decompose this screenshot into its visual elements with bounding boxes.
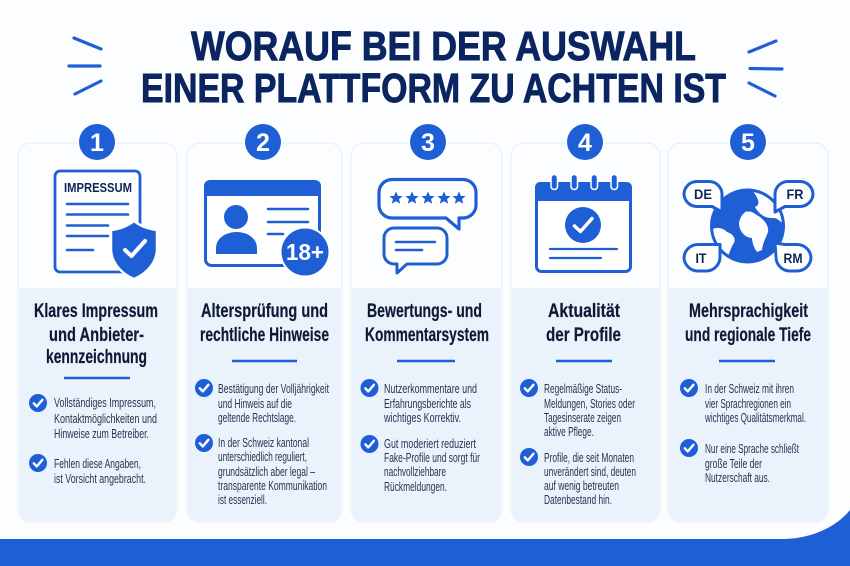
bullet 3.2: Fake-Profile und sorgt für [384,450,480,465]
heading 3: Kommentarsystem [365,325,489,346]
title [141,23,726,111]
bullet 1.1: Hinweise zum Betreiber. [54,426,149,441]
bullet 2.2 [195,434,327,507]
bullet 3.2: nachvollziehbare [384,464,446,479]
bullet 2.1: und Hinweis auf die [218,396,292,411]
icon: ID card 18+ [204,180,330,276]
badge 1 [77,122,117,162]
title: WORAUF BEI DER AUSWAHL [191,23,696,69]
badge 5: 5 [741,129,755,157]
bullet 1.1: Vollständiges Impressum, [54,395,156,410]
heading 5: Mehrsprachigkeit [689,301,809,322]
bullet 4.2: Profile, die seit Monaten [544,450,634,465]
bullet 1.2: Fehlen diese Angaben, [54,456,141,471]
bullet 2.1: Bestätigung der Volljährigkeit [218,381,329,396]
bullet 2.2: In der Schweiz kantonal [218,435,309,450]
heading 2: Altersprüfung und [201,301,328,322]
badge 2 [243,122,283,162]
heading 4: Aktualität [548,301,621,322]
bullet 5.2 [680,439,799,485]
bullet 4.2: auf wenig betreuten [544,478,619,493]
icon: document with shield [55,171,157,279]
panel 4: Aktualität [511,122,660,522]
icon: calendar with check [535,174,632,272]
icon: rating speech bubbles [379,180,476,273]
bullet 4.1: Tagesinserate zeigen [544,410,621,425]
bullet 4.2 [520,448,636,507]
bullet 2.2: unterschiedlich reguliert, [218,449,307,464]
heading 4 [546,301,621,346]
bullet 5.2: Nutzerschaft aus. [705,470,770,485]
bullet 1.2: ist Vorsicht angebracht. [54,471,146,486]
badge 4: 4 [578,129,592,157]
icon: document with shield: IMPRESSUM [64,181,132,195]
bullet 4.2: unverändert sind, deuten [544,464,636,479]
bullet 1.2 [29,454,146,486]
badge 1: 1 [90,129,104,157]
heading 1 [34,301,158,368]
bubble FR: FR [786,186,804,202]
panel 3: Bewertungen [351,122,502,522]
bullet 2.2: transparente Kommunikation [218,478,327,493]
bullet 3.2: Rückmeldungen. [384,479,447,494]
bullet 3.2 [360,435,480,494]
bottom wave band [0,510,850,566]
heading 1: kennzeichnung [46,347,147,368]
panel 2: Altersprüfung [187,122,342,522]
heading 3 [365,301,489,346]
bullet 3.1: wichtiges Korrektiv. [383,410,461,425]
bullet 2.1 [195,379,329,425]
bullet 5.2: große Teile der [705,456,762,471]
heading 2: rechtliche Hinweise [200,325,329,346]
bullet 4.1: aktive Pflege. [544,424,594,439]
heading 5 [685,301,811,346]
badge 3 [408,122,448,162]
bullet 4.1 [520,379,635,439]
bullet 3.1 [360,379,477,425]
bullet 2.2: grundsätzlich aber legal – [218,464,315,479]
heading 1: und Anbieter- [49,325,144,346]
badge 4 [565,122,605,162]
icon: globe with language bubbles [684,181,813,271]
panel 5: Mehrsprachigkeit [668,122,828,522]
bubble IT: IT [696,250,707,266]
bullet 5.1: vier Sprachregionen ein [705,396,791,411]
icon: ID card 18+: 18+ [286,239,324,265]
badge 3: 3 [421,129,435,157]
heading 2 [200,301,329,346]
bullet 3.1: Nutzerkommentare und [384,381,477,396]
bubble DE: DE [694,186,712,202]
bullet 4.1: Meldungen, Stories oder [544,396,635,411]
title: EINER PLATTFORM ZU ACHTEN IST [141,65,726,111]
bullet 4.1: Regelmäßige Status- [544,381,622,396]
bullet 1.1: Kontaktmöglichkeiten und [54,411,157,426]
heading 1: Klares Impressum [34,301,158,322]
bullet 2.2: ist essenziell. [218,492,267,507]
bullet 3.1: Erfahrungsberichte als [384,396,471,411]
badge 5 [728,122,768,162]
decorative rays right [749,41,782,96]
decorative rays left [69,38,101,94]
heading 3: Bewertungs- und [367,301,482,322]
bubble RM: RM [784,251,802,266]
badge 2: 2 [256,129,270,157]
bullet 5.1 [680,379,806,425]
bullet 4.2: Datenbestand hin. [544,492,612,507]
bullet 5.1: In der Schweiz mit ihren [705,381,794,396]
bullet 2.1: geltende Rechtslage. [218,410,296,425]
panel 1: Impressum [18,122,177,522]
bullet 3.2: Gut moderiert reduziert [384,436,476,451]
bullet 1.1 [29,394,157,441]
heading 4: der Profile [546,325,621,346]
